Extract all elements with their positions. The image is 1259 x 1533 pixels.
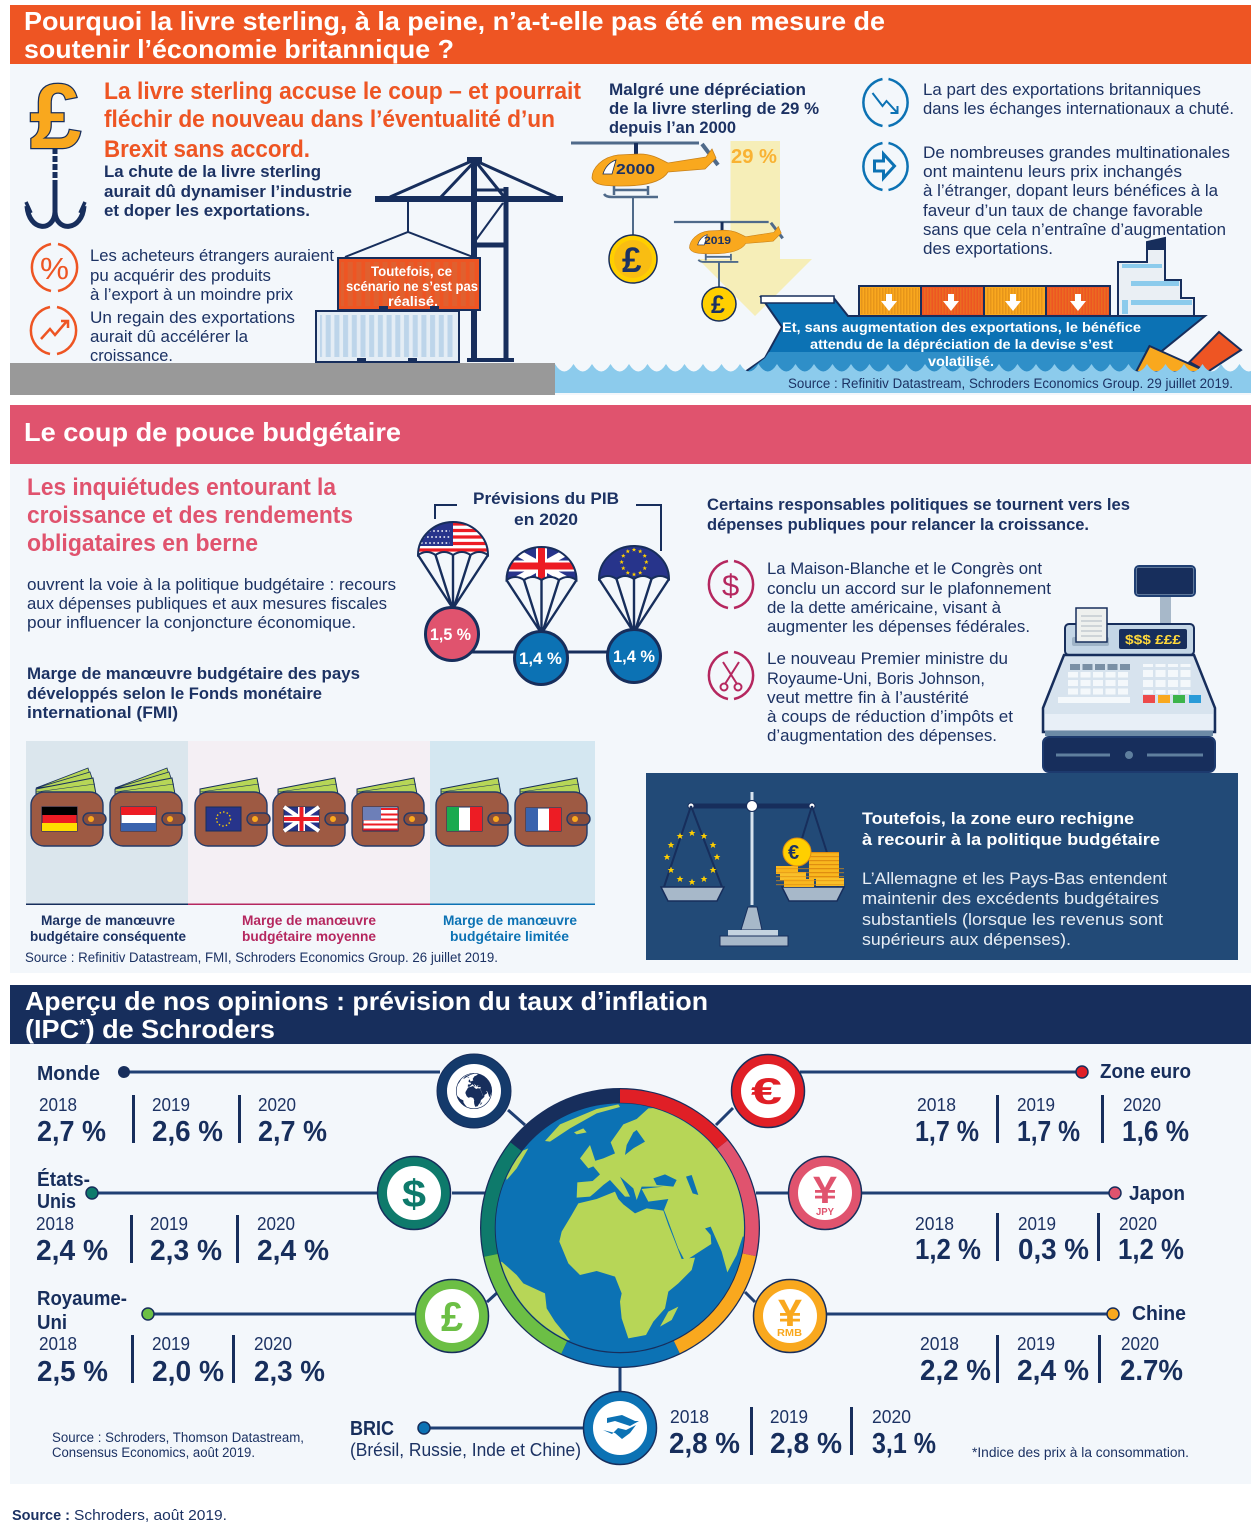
label: conséquente: Marge de manœuvre [41,913,175,928]
text: malgré une dépréciation: Malgré une dépréciation [609,80,806,99]
icon: cash register: $$$ £££ [1125,632,1182,647]
label: moyenne: budgétaire moyenne [242,929,376,944]
icon: helicopter 2019 with coin: £ [711,291,725,319]
icon: balance scale [661,792,844,946]
region: Chine: Chine [1132,1303,1186,1325]
pale container [316,311,459,362]
badge: Japon [788,1156,862,1230]
text: acheteurs étrangers: Les acheteurs étrangers auraient [90,246,334,265]
label: moyenne [242,913,376,944]
region: Royaume-Uni: 2,5 % [37,1356,108,1388]
region: Monde: 2,7 % [258,1116,327,1148]
badge: Zone euro: € [751,1071,782,1112]
wallets panel: conséquente [26,741,188,944]
region: Chine: 2,2 % [920,1355,991,1387]
region: Monde: 2,6 % [152,1116,223,1148]
text: Maison-Blanche: conclu un accord sur le plafonnement [767,579,1051,598]
panel: prévision d'inflation [10,985,1251,1484]
wallet: Germany [31,768,106,846]
badge: Japon: ¥ [813,1170,837,1212]
value: United States 1,5 %: 1,5 % [430,625,471,644]
icon: falling exports [863,79,908,126]
text: malgré une dépréciation: de la livre sterling de 29 % [609,99,819,118]
region: Monde: 2019 [152,1095,190,1115]
region: Monde [37,1063,327,1148]
value: United States 1,5 % [426,608,478,660]
text: marge de manœuvre: développés selon le Fonds monétaire [27,684,322,703]
icon: scissors [709,652,753,699]
heading: inquiétudes: obligataires en berne [27,530,258,557]
text: malgré une dépréciation: depuis l’an 2000 [609,118,736,137]
icon: percent: % [40,251,69,286]
text: Boris Johnson: d’augmentation des dépenses. [767,726,997,745]
connector lines [92,1072,1115,1428]
text: sans augmentation: Et, sans augmentation des exportations, le bénéfice [782,320,1142,335]
value: European Union 1,4 %: 1,4 % [613,647,655,666]
crane [345,157,563,362]
region: BRIC [350,1407,936,1460]
badge: Chine: ¥ [778,1293,802,1335]
region: BRIC: BRIC [350,1418,394,1440]
region: Royaume-Uni: 2018 [39,1334,77,1354]
wallet: European Union [195,778,270,846]
panel: livre sterling [10,5,1251,395]
region: Chine: 2.7% [1120,1355,1183,1387]
icon: dollar [709,561,753,608]
region: BRIC: 2018 [670,1407,709,1427]
wallet: Netherlands [110,768,185,846]
region: Chine: 2019 [1017,1334,1055,1354]
chart: prévisions du PIB: en 2020 [514,510,578,529]
badge: États-Unis [378,1156,450,1230]
wallet: United Kingdom [273,778,348,846]
orange container with text [338,258,480,310]
badge: Zone euro [732,1054,804,1128]
label: limitée [443,913,577,944]
text: multinationales: De nombreuses grandes multinationales [923,143,1230,162]
title: aperçu de nos opinions: Aperçu de nos opinions : prévision du taux d’inflation [25,986,708,1016]
text: sans augmentation: attendu de la dépréciation de la devise s’est [810,337,1114,352]
parachute: European Union [598,545,670,631]
region: BRIC: 2019 [770,1407,808,1427]
region: Zone euro: 1,7 % [1017,1116,1080,1148]
region: Japon: 2018 [915,1214,954,1234]
region: Japon: 0,3 % [1018,1234,1089,1266]
region: États-Unis: Unis [37,1191,76,1213]
text: Allemagne et Pays-Bas [862,869,1167,949]
region: BRIC: 3,1 % [872,1428,936,1460]
region: États-Unis: États- [37,1168,90,1191]
title: livre sterling: soutenir l’économie britannique ? [24,34,454,64]
panel: coup de pouce budgétaire [10,405,1251,973]
icon: helicopter 2019 with coin [674,222,783,321]
region: États-Unis: 2,3 % [150,1235,222,1267]
source: Source : Schroders, Thomson Datastream, [52,1430,304,1445]
text: Maison-Blanche: La Maison-Blanche et le Congrès ont [767,559,1042,578]
source: Source : Refinitiv Datastream, Schroders Economics Group. 29 juillet 2019. [788,376,1233,391]
region: BRIC: 2,8 % [770,1428,842,1460]
heading: la livre sterling accuse le coup: La livre sterling accuse le coup – et pourrait [104,78,581,105]
title: aperçu de nos opinions: (IPC [25,1014,77,1044]
title: livre sterling: Pourquoi la livre sterling, à la peine, n’a-t-elle pas été en mesure de [24,6,885,36]
badge: Royaume-Uni [416,1280,488,1352]
text: acheteurs étrangers: pu acquérir des produits [90,266,271,285]
text: Allemagne et Pays-Bas: substantiels (lorsque les revenus sont [862,910,1163,929]
panel: zone euro [646,773,1238,960]
region: Chine: 2018 [920,1334,959,1354]
text: sans augmentation [782,320,1142,369]
region: États-Unis: 2,4 % [36,1235,108,1267]
text: politique budgétaire: ouvrent la voie à la politique budgétaire : recours [27,575,396,594]
footer source: Source : [12,1508,70,1524]
text: multinationales: ont maintenu leurs prix inchangés [923,162,1182,181]
region: Japon: 2019 [1018,1214,1056,1234]
region: Zone euro: 2020 [1123,1095,1161,1115]
text: regain des exportations: Un regain des exportations [90,308,295,327]
water [555,364,1251,393]
badge: Chine [754,1280,826,1352]
region: Japon [915,1183,1185,1266]
chart: prévisions du PIB [417,489,670,684]
text: Maison-Blanche: de la dette américaine, visant à [767,598,1002,617]
label: conséquente: budgétaire conséquente [30,929,186,944]
text: chute de la livre: aurait dû dynamiser l’industrie [104,182,352,201]
text: Allemagne et Pays-Bas: L’Allemagne et les Pays-Bas entendent [862,869,1167,888]
region: Zone euro: 2019 [1017,1095,1055,1115]
region: Zone euro: 1,6 % [1122,1116,1189,1148]
badge: Chine: RMB [777,1327,802,1339]
region: Monde: 2,7 % [37,1116,106,1148]
text: Boris Johnson: Le nouveau Premier ministre du [767,649,1008,668]
region: Zone euro: Zone euro [1100,1061,1191,1083]
text: multinationales: sans que cela n’entraîne d’augmentation [923,220,1226,239]
region: Royaume-Uni: 2020 [254,1334,292,1354]
text: marge de manœuvre [27,664,360,722]
value: United Kingdom 1,4 %: 1,4 % [519,649,562,668]
region: Royaume-Uni: Uni [37,1312,67,1334]
orange container with text: scénario ne s’est pas [346,279,478,294]
region: Royaume-Uni: 2,0 % [152,1356,224,1388]
icon: balance scale: € [788,842,799,864]
icon: helicopter 2019 with coin: 2019 [704,235,731,247]
badge: Japon: JPY [816,1206,834,1218]
text: regain des exportations: croissance. [90,346,173,365]
text: part des exportations: dans les échanges internationaux a chuté. [923,99,1234,118]
footer source: Schroders, août 2019. [74,1508,227,1524]
text: chute de la livre [104,162,352,220]
heading: inquiétudes: croissance et des rendements [27,502,353,529]
badge: Royaume-Uni: £ [441,1293,463,1340]
region: Chine: 2020 [1121,1334,1159,1354]
icon: right arrow [863,143,908,190]
heading: la livre sterling accuse le coup [104,78,581,163]
text: multinationales [923,143,1230,258]
label: moyenne: Marge de manœuvre [242,913,376,928]
region: Chine: 2,4 % [1017,1355,1089,1387]
region: États-Unis [36,1168,329,1267]
wallets panel: moyenne [188,741,430,944]
text: marge de manœuvre: Marge de manœuvre budgétaire des pays [27,664,360,683]
text: zone euro rechigne [862,809,1160,849]
text: chute de la livre: et doper les exportations. [104,201,310,220]
source: Source : Refinitiv Datastream, FMI, Schroders Economics Group. 26 juillet 2019. [25,950,498,965]
heading: la livre sterling accuse le coup: fléchir de nouveau dans l’éventualité d’un [104,106,555,133]
region: Royaume-Uni: 2019 [152,1334,190,1354]
text: responsables politiques: Certains responsables politiques se tournent vers les [707,495,1130,514]
parachute: United States [417,521,489,607]
text: politique budgétaire: aux dépenses publiques et aux mesures fiscales [27,594,387,613]
title: livre sterling [10,5,1251,64]
label: conséquente [30,913,186,944]
region: BRIC: 2020 [872,1407,911,1427]
badge: Monde [437,1054,511,1128]
container ship [745,238,1241,372]
text: regain des exportations [90,308,295,365]
region: Japon: 2020 [1119,1214,1157,1234]
badge: États-Unis: $ [402,1173,426,1216]
region: BRIC: (Brésil, Russie, Inde et Chine) [350,1440,581,1460]
text: Boris Johnson [767,649,1013,745]
wallet: United States [352,778,427,846]
text: Boris Johnson: veut mettre fin à l’austérité [767,688,969,707]
parachute: United Kingdom [506,546,578,632]
text: responsables politiques [707,495,1130,534]
label: limitée: Marge de manœuvre [443,913,577,928]
title: aperçu de nos opinions: ) de Schroders [86,1014,275,1044]
region: États-Unis: 2018 [36,1214,74,1234]
icon: percent [32,244,77,291]
title: aperçu de nos opinions: * [79,1017,86,1034]
region: Royaume-Uni [37,1288,325,1388]
value: European Union 1,4 % [608,630,660,682]
text: multinationales: à l’étranger, dopant leurs bénéfices à la [923,181,1219,200]
footnote: *Indice des prix à la consommation. [972,1445,1189,1460]
icon: growth chart [31,307,76,354]
footer source [12,1508,227,1524]
text: Maison-Blanche: augmenter les dépenses fédérales. [767,617,1030,636]
text: multinationales: faveur d’un taux de change favorable [923,201,1203,220]
heading: la livre sterling accuse le coup: Brexit sans accord. [104,136,310,163]
icon: helicopter 2000 with coin: 2000 [616,161,655,178]
region: Monde: 2018 [39,1095,77,1115]
icon: cash register [1043,566,1215,772]
region: Zone euro [915,1061,1191,1148]
globe [480,1088,780,1368]
region: Japon: 1,2 % [1118,1234,1184,1266]
region: Japon: 1,2 % [915,1234,981,1266]
text: acheteurs étrangers: à l’export à un moindre prix [90,285,293,304]
chart: prévisions du PIB: Prévisions du PIB [473,489,619,508]
text: politique budgétaire [27,575,396,632]
text: regain des exportations: aurait dû accélérer la [90,327,249,346]
region: Chine [920,1303,1186,1387]
region: États-Unis: 2020 [257,1214,295,1234]
title: aperçu de nos opinions [10,985,1251,1044]
heading: inquiétudes [27,474,353,557]
region: Royaume-Uni: Royaume- [37,1288,127,1310]
title: coup de pouce: Le coup de pouce budgétaire [24,417,401,447]
source: Consensus Economics, août 2019. [52,1445,255,1460]
heading: inquiétudes: Les inquiétudes entourant la [27,474,337,501]
region: BRIC: 2,8 % [669,1428,740,1460]
arrow: 29 % depreciation: 29 % [731,146,777,168]
text: chute de la livre: La chute de la livre sterling [104,162,321,181]
region: États-Unis: 2,4 % [257,1235,329,1267]
orange container with text: réalisé. [388,294,438,309]
text: malgré une dépréciation [609,80,819,137]
value: United Kingdom 1,4 % [514,632,568,684]
region: Zone euro: 2018 [917,1095,956,1115]
arrow: 29 % depreciation [698,141,812,316]
text: sans augmentation: volatilisé. [928,354,994,369]
source [52,1430,304,1460]
wallet: France [515,778,590,846]
text: Boris Johnson: à coups de réduction d’impôts et [767,707,1013,726]
text: part des exportations [923,80,1234,118]
text: part des exportations: La part des exportations britanniques [923,80,1201,99]
text: responsables politiques: dépenses publiques pour relancer la croissance. [707,515,1089,534]
orange container with text: Toutefois, ce [371,264,452,279]
region: Zone euro: 1,7 % [915,1116,979,1148]
icon: pound anchor: £ [30,66,81,168]
region: États-Unis: 2019 [150,1214,188,1234]
title: coup de pouce [10,405,1251,464]
text: politique budgétaire: pour influencer la conjoncture économique. [27,613,356,632]
text: Boris Johnson: Royaume-Uni, Boris Johnson, [767,669,985,688]
quay ground [10,363,555,395]
badge: BRIC [584,1392,656,1464]
text: zone euro rechigne: Toutefois, la zone euro rechigne [862,809,1134,828]
text: Maison-Blanche [767,559,1051,636]
wallet: Italy [436,778,511,846]
text: multinationales: des exportations. [923,239,1053,258]
region: Japon: Japon [1129,1183,1185,1205]
icon: dollar: $ [722,568,739,603]
text: zone euro rechigne: à recourir à la politique budgétaire [862,830,1160,849]
text: acheteurs étrangers [90,246,334,304]
text: Allemagne et Pays-Bas: supérieurs aux dépenses). [862,930,1071,949]
region: Monde: Monde [37,1063,100,1085]
icon: pound anchor [26,66,85,226]
label: limitée: budgétaire limitée [450,929,570,944]
region: Monde: 2020 [258,1095,296,1115]
text: Allemagne et Pays-Bas: maintenir des excédents budgétaires [862,889,1159,908]
icon: helicopter 2000 with coin: £ [622,241,642,280]
icon: helicopter 2000 with coin [571,143,718,283]
text: marge de manœuvre: international (FMI) [27,703,178,722]
region: Royaume-Uni: 2,3 % [254,1356,325,1388]
wallets panel: limitée [430,741,595,944]
